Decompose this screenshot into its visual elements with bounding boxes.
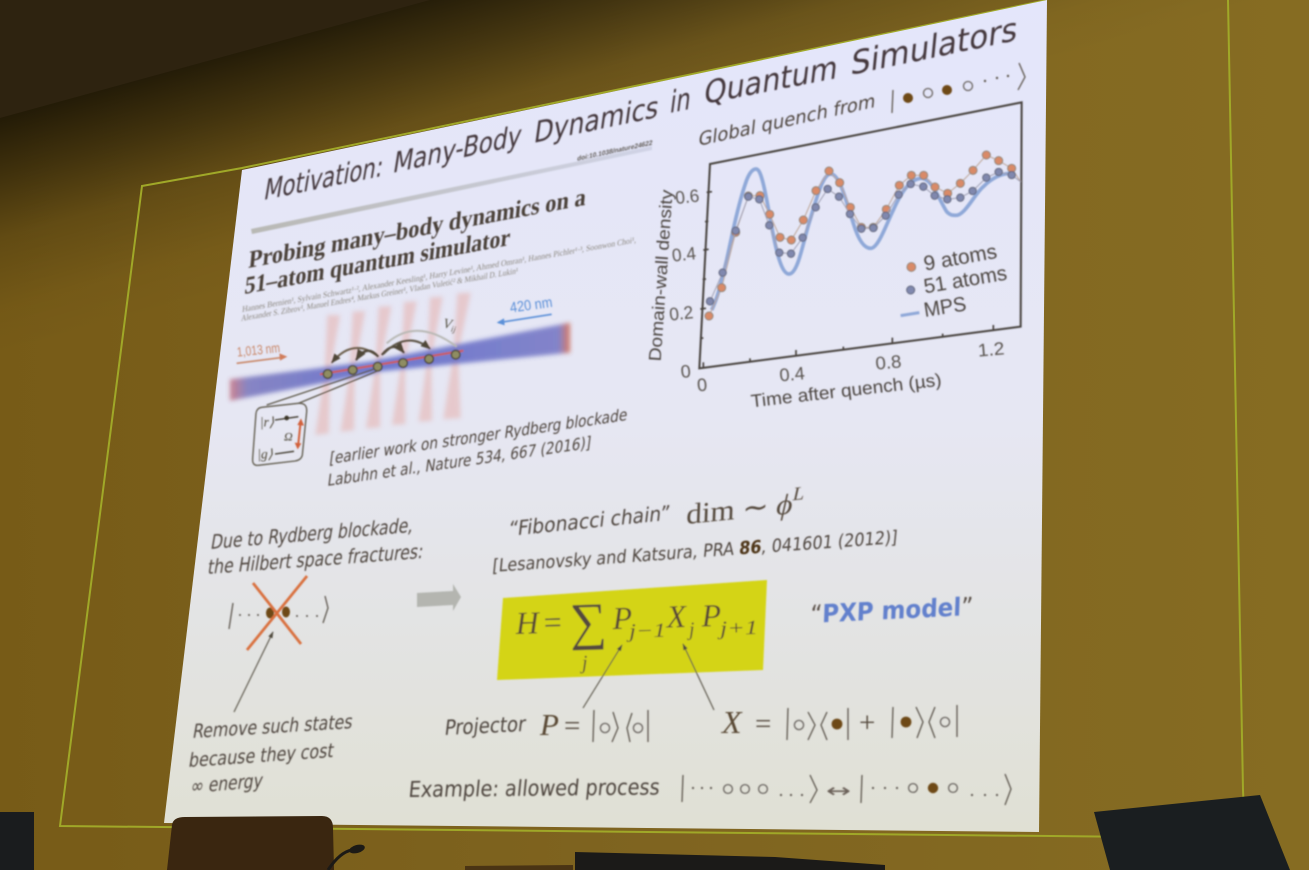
chart legend: MPS xyxy=(922,293,968,322)
earlier work citation: [earlier work on stronger Rydberg blockade xyxy=(328,405,629,468)
title: Quantum xyxy=(702,48,840,112)
energy level inset xyxy=(253,403,307,465)
x axis tick labels: 0.8 xyxy=(875,351,902,374)
chart legend: 9 atoms xyxy=(922,240,999,276)
y axis tick labels xyxy=(668,186,700,382)
energy level inset: |r⟩ xyxy=(260,415,275,430)
projected slide xyxy=(164,0,1047,832)
1,013 nm label: 1,013 nm xyxy=(236,340,281,360)
Hamiltonian formula: P xyxy=(611,600,633,636)
audience: chair back xyxy=(167,816,334,870)
inset leader lines xyxy=(267,369,378,405)
title: Motivation: xyxy=(262,149,386,207)
projector formula: = xyxy=(564,710,580,742)
projector formula xyxy=(539,707,648,742)
Hamiltonian formula: j xyxy=(579,652,588,674)
audience: left desk edge xyxy=(465,865,573,870)
earlier work citation: Labuhn et al., Nature 534, 667 (2016)] xyxy=(326,433,592,490)
grey block arrow xyxy=(417,584,461,611)
projector formula: P xyxy=(539,707,559,742)
Hamiltonian formula: = xyxy=(543,604,562,640)
51 atoms series xyxy=(706,168,1021,305)
interaction arcs xyxy=(332,331,457,363)
x axis tick labels: 1.2 xyxy=(977,338,1005,361)
y axis tick labels: 0.6 xyxy=(674,186,700,208)
Hamiltonian formula xyxy=(514,589,759,676)
crossed-out state xyxy=(229,576,328,650)
optical tweezer beams xyxy=(315,293,471,435)
ceiling shadow xyxy=(0,0,1309,400)
MPS curve xyxy=(712,169,1012,310)
Vij label: ij xyxy=(450,324,457,334)
example state transition: ↔ xyxy=(826,780,851,802)
Hamiltonian formula: j xyxy=(686,619,695,641)
X operator formula: = xyxy=(755,708,771,740)
title xyxy=(262,9,1020,207)
atom array diagram xyxy=(230,293,570,465)
9 atoms series xyxy=(705,151,1021,320)
X operator formula: + xyxy=(859,707,875,739)
title: Dynamics xyxy=(532,90,661,151)
beam core xyxy=(320,351,463,374)
Vij label: V xyxy=(442,316,453,333)
paper heading: 51–atom quantum simulator xyxy=(243,224,512,300)
atoms xyxy=(323,350,460,378)
Hamiltonian formula: j+1 xyxy=(716,617,758,640)
Fibonacci chain label: “Fibonacci chain” xyxy=(507,501,671,541)
paper authors: Alexander S. Zibrov¹, Manuel Endres⁴, Markus Greiner¹, Vladan Vuletić² & Mikhail D. Lukin¹ xyxy=(241,265,519,323)
slide contents xyxy=(187,9,1025,805)
Hilbert space text xyxy=(206,513,426,579)
chart legend: 51 atoms xyxy=(922,262,1009,298)
doi reference: doi:10.1038/nature24622 xyxy=(577,140,653,163)
removal explanation text: because they cost xyxy=(187,739,336,772)
Hamiltonian formula: H xyxy=(514,604,541,641)
title rule xyxy=(251,146,652,234)
audience: centre monitor xyxy=(575,852,885,870)
420 nm label xyxy=(497,295,553,325)
title: Many-Body xyxy=(391,118,524,180)
x axis title: Time after quench (µs) xyxy=(750,370,943,411)
dark ceiling band xyxy=(0,0,430,118)
1013 nm excitation beam xyxy=(230,361,377,401)
paper heading: Probing many–body dynamics on a xyxy=(247,184,588,274)
title: Simulators xyxy=(849,9,1020,83)
audience: laptop screen xyxy=(1094,795,1290,870)
arrow: projector xyxy=(583,645,622,708)
paper heading xyxy=(243,184,588,300)
y axis tick labels: 0.2 xyxy=(668,302,694,325)
PXP model label: “PXP model” xyxy=(810,592,974,629)
y axis tick labels: 0 xyxy=(680,361,692,382)
energy level inset: |g⟩ xyxy=(257,446,274,461)
chart legend xyxy=(901,240,1009,322)
chart frame xyxy=(699,102,1022,368)
arrow: state to explanation xyxy=(234,632,273,712)
dim formula: dim ∼ ϕ xyxy=(686,488,792,531)
title: in xyxy=(668,81,693,121)
paper authors: Hannes Bernien¹, Sylvain Schwartz¹·², Alexander Keesling¹, Harry Levine¹, Ahmed Omran¹, Hannes Pichler¹·³, Soonwon Choi¹, xyxy=(242,234,637,314)
energy level inset: Ω xyxy=(284,430,293,444)
y axis tick labels: 0.4 xyxy=(671,243,697,266)
arrow: X operator xyxy=(683,644,714,710)
projector label: Projector xyxy=(443,711,528,740)
removal explanation text: Remove such states xyxy=(191,710,355,743)
Lesanovsky citation: [Lesanovsky and Katsura, PRA 86, 041601 (2012)] xyxy=(492,527,898,577)
Hamiltonian formula: P xyxy=(700,597,722,634)
Hilbert space text: the Hilbert space fractures: xyxy=(206,539,426,579)
axis ticks xyxy=(700,192,993,368)
audience: left monitor xyxy=(0,812,34,870)
quench heading xyxy=(698,63,1025,151)
example state transition xyxy=(682,774,1011,805)
Hamiltonian formula: X xyxy=(664,598,688,635)
x axis tick labels xyxy=(696,338,1005,395)
line chart: domain-wall density xyxy=(645,102,1022,411)
x axis tick labels: 0.4 xyxy=(779,363,806,385)
420 nm excitation beam xyxy=(377,323,570,372)
dim formula: L xyxy=(791,483,805,505)
Hilbert space text: Due to Rydberg blockade, xyxy=(209,513,415,554)
420 nm label: 420 nm xyxy=(509,295,553,317)
example label: Example: allowed process xyxy=(407,776,661,803)
microphone head xyxy=(348,843,366,855)
Hamiltonian formula: ∑ xyxy=(569,593,608,651)
yellow formula box xyxy=(497,580,767,680)
audience: microphone xyxy=(328,850,352,870)
y axis title: Domain-wall density xyxy=(645,189,677,362)
X operator formula: X xyxy=(720,704,743,740)
removal explanation text xyxy=(187,710,355,798)
Hamiltonian formula: j−1 xyxy=(625,620,666,643)
quench heading: Global quench from xyxy=(698,90,877,151)
x axis tick labels: 0 xyxy=(696,375,708,395)
removal explanation text: ∞ energy xyxy=(189,769,265,798)
X operator formula xyxy=(720,704,957,740)
